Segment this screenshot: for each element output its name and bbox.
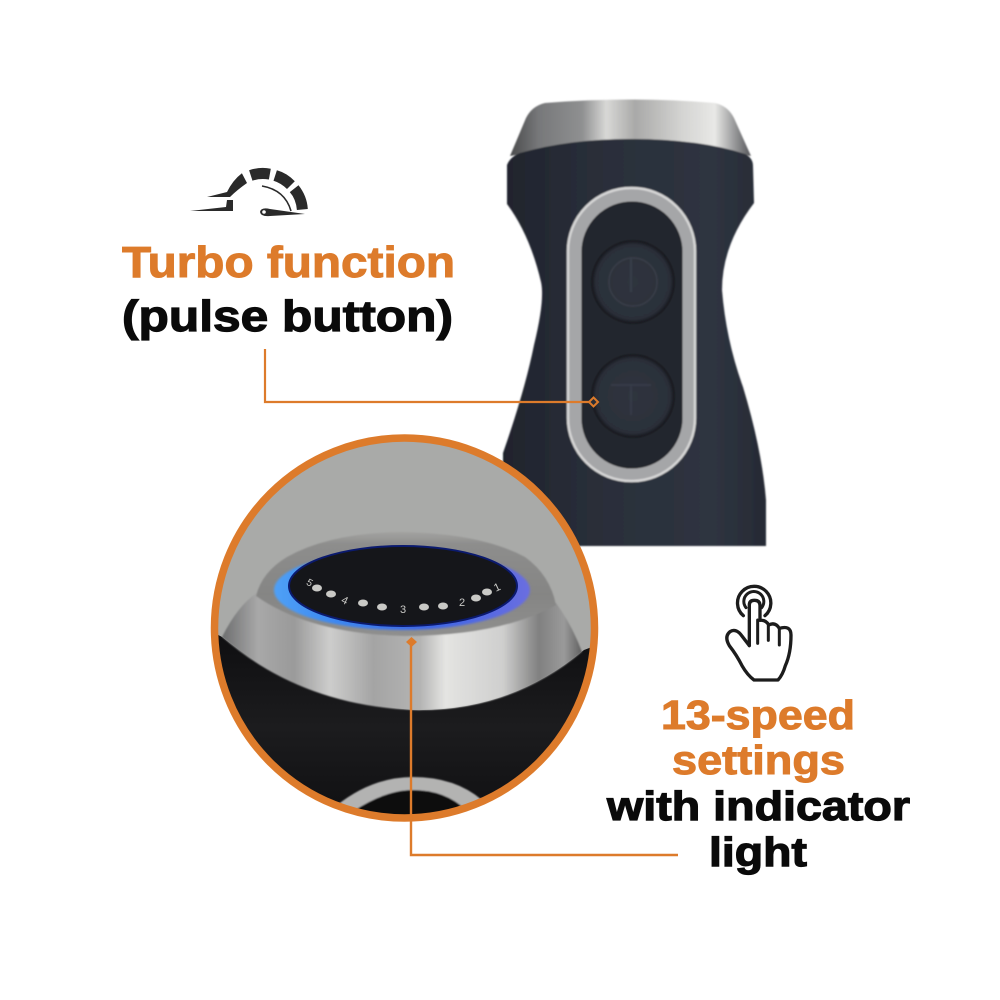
dark button panel	[582, 202, 682, 468]
handle body	[503, 139, 766, 546]
speed dots and numbers: 1	[492, 581, 503, 595]
turbo button	[591, 354, 675, 438]
zoom circle detail	[200, 438, 610, 830]
speed dots and numbers: 4	[339, 594, 350, 608]
silver surround arc in circle	[339, 776, 481, 808]
icon: speedometer	[190, 168, 308, 216]
power button	[591, 240, 675, 324]
metal cap	[222, 532, 582, 710]
silver button surround	[568, 188, 695, 481]
blue light ring	[274, 550, 530, 630]
dark dial	[289, 546, 517, 626]
orange circle border	[214, 438, 594, 818]
speed dots and numbers: 2	[459, 597, 465, 609]
heading: turbo function: Turbo function	[122, 238, 455, 287]
metal top collar	[510, 100, 751, 156]
blender handle photo	[503, 100, 766, 546]
text: pulse button: (pulse button)	[122, 292, 453, 341]
heading: settings: settings	[672, 737, 845, 783]
text: light: light	[709, 829, 807, 875]
black body in circle	[218, 635, 590, 803]
speed dots and numbers: 5	[304, 577, 315, 590]
speed dots and numbers: 3	[400, 604, 406, 616]
infographic canvas	[122, 98, 910, 876]
icon: touch hand	[727, 586, 791, 680]
text: with indicator: with indicator	[606, 783, 910, 829]
speed dots and numbers	[306, 578, 501, 613]
turbo connector line	[265, 349, 598, 406]
heading: 13-speed: 13-speed	[661, 692, 855, 738]
speed connector line	[406, 637, 678, 855]
cap top surface	[256, 532, 556, 636]
